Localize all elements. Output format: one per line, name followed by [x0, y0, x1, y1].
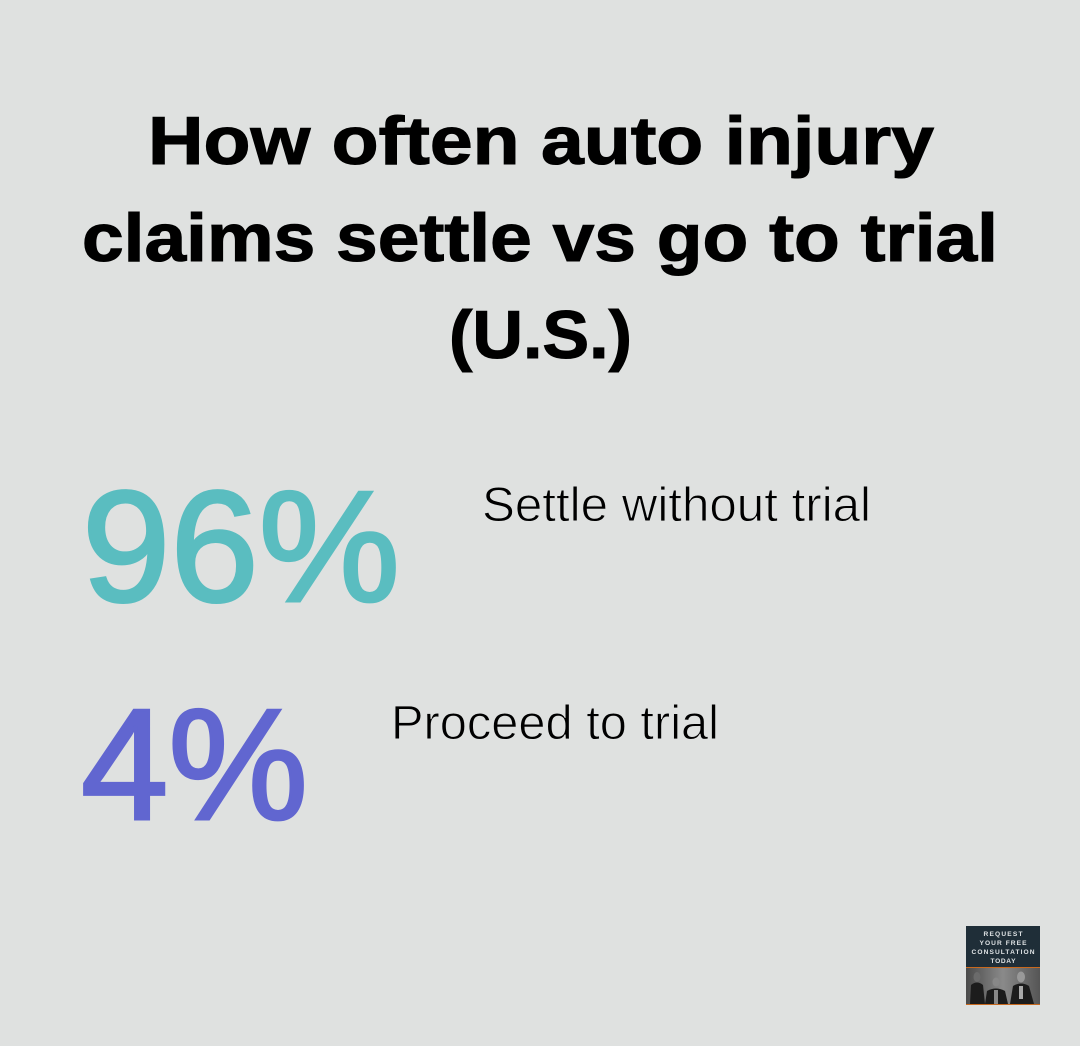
title: claims settle vs go to trial: [82, 200, 998, 276]
stat: 4%: 4%: [81, 677, 308, 853]
photo: three people: [970, 972, 1034, 1004]
title: [82, 103, 998, 373]
logo: request your free consultation today: TODAY: [990, 958, 1016, 965]
label: settle without trial: Settle without trial: [482, 479, 871, 532]
logo: request your free consultation today: YOUR FREE: [980, 940, 1027, 947]
stat: 96%: 96%: [82, 459, 400, 635]
title: (U.S.): [449, 297, 632, 373]
label: proceed to trial: Proceed to trial: [391, 697, 719, 750]
logo: request your free consultation today: CONSULTATION: [972, 949, 1035, 956]
logo: request your free consultation today: [966, 926, 1040, 1005]
logo: request your free consultation today: REQUEST: [984, 931, 1022, 938]
title: How often auto injury: [148, 103, 934, 179]
